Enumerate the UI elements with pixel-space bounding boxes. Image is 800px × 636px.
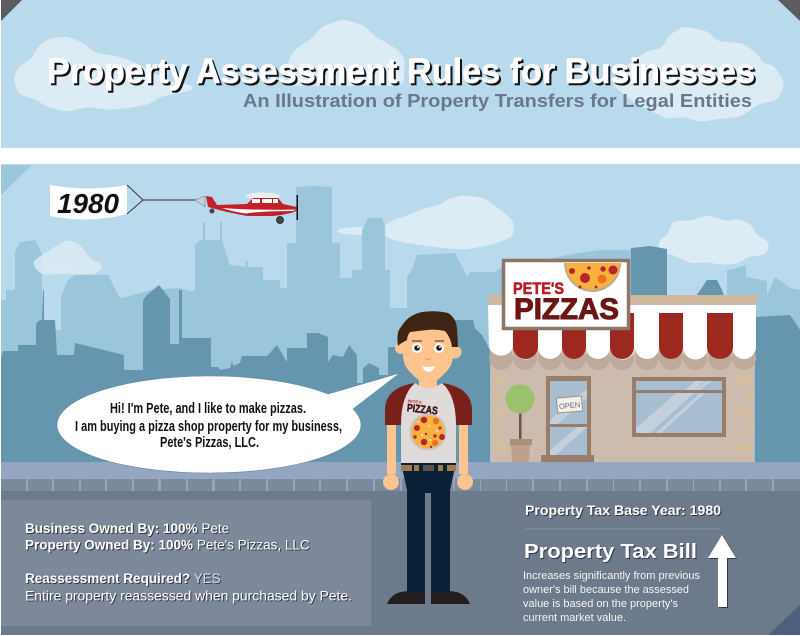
shirt (401, 383, 456, 463)
mouth (422, 366, 435, 372)
title: Property Assessment Rules for Businesses (47, 51, 755, 91)
awning shadow (489, 346, 756, 370)
cloud: scene middle (337, 197, 512, 248)
text: base year: Property Tax Base Year: 1980 (525, 503, 721, 518)
ears (395, 342, 462, 358)
text: property owned: Property Owned By: 100% Pete's Pizzas, LLC (25, 538, 310, 552)
text: reassessment: Reassessment Required? YES (25, 571, 221, 586)
panel: property tax info (523, 503, 736, 624)
cloud: scene small left (33, 241, 102, 273)
face (403, 322, 453, 383)
subtitle: An Illustration of Property Transfers for Legal Entities (243, 90, 752, 111)
door (541, 376, 594, 462)
text: tax bill explanation: current market value. (523, 612, 626, 624)
belt (401, 463, 456, 471)
cloud: scene right (659, 217, 768, 263)
roof band (488, 295, 757, 303)
panel: main scene sky (1, 164, 800, 464)
shirt pizza (410, 414, 446, 450)
text: explanation: Entire property reassessed when purchased by Pete. (25, 588, 352, 604)
awning (488, 305, 756, 360)
sidewalk (1, 462, 800, 491)
shirt logo (406, 398, 439, 418)
panel: ownership info (1, 500, 371, 626)
pizza shop (488, 260, 757, 462)
text: tax bill explanation: value is based on the property's (523, 598, 678, 610)
hair (397, 311, 458, 347)
cloud: header left (15, 38, 197, 110)
open sign: OPEN (559, 400, 581, 411)
sleeves (385, 383, 472, 425)
pants (401, 463, 456, 592)
window (632, 377, 726, 437)
eyes (412, 341, 444, 353)
shop bricks (492, 374, 754, 452)
skyline: light layer (1, 186, 800, 462)
shirt logo: PIZZAS (406, 402, 438, 418)
text: tax bill explanation (523, 570, 700, 624)
icon: up arrow (708, 535, 736, 607)
nose (425, 358, 431, 360)
panel: header sky (1, 0, 800, 148)
panel: bottom band (1, 491, 800, 635)
shoes (387, 591, 470, 604)
banner year: 1980 (57, 188, 119, 219)
heading: property tax bill: Property Tax Bill (524, 540, 697, 563)
character: Pete (383, 311, 473, 604)
speech text: Pete's Pizzas, LLC. (160, 435, 259, 451)
plant (506, 384, 534, 462)
arms (383, 372, 473, 490)
speech text: Hi! I'm Pete, and I like to make pizzas. (110, 401, 306, 417)
text: business owned: Business Owned By: 100% Pete (25, 521, 229, 536)
skyline: dark layer (1, 285, 490, 462)
text: tax bill explanation: owner's bill because the assessed (523, 584, 689, 596)
shop sign: PIZZAS (514, 293, 619, 326)
plane with banner (50, 185, 298, 224)
speech bubble (57, 373, 400, 473)
airplane (206, 192, 298, 224)
shop sign (504, 260, 628, 328)
cloud: header right (613, 28, 783, 120)
speech text: I am buying a pizza shop property for my business, (75, 419, 342, 435)
cloud: header center (290, 21, 403, 84)
sign text: PETE'S (513, 280, 564, 298)
sign pizza (564, 263, 621, 292)
skyline: right dark buildings (631, 246, 800, 462)
text: tax bill explanation: Increases significantly from previous (523, 570, 700, 582)
banner (50, 185, 127, 220)
shirt logo: PETE'S (407, 398, 422, 405)
speech text (75, 401, 342, 451)
